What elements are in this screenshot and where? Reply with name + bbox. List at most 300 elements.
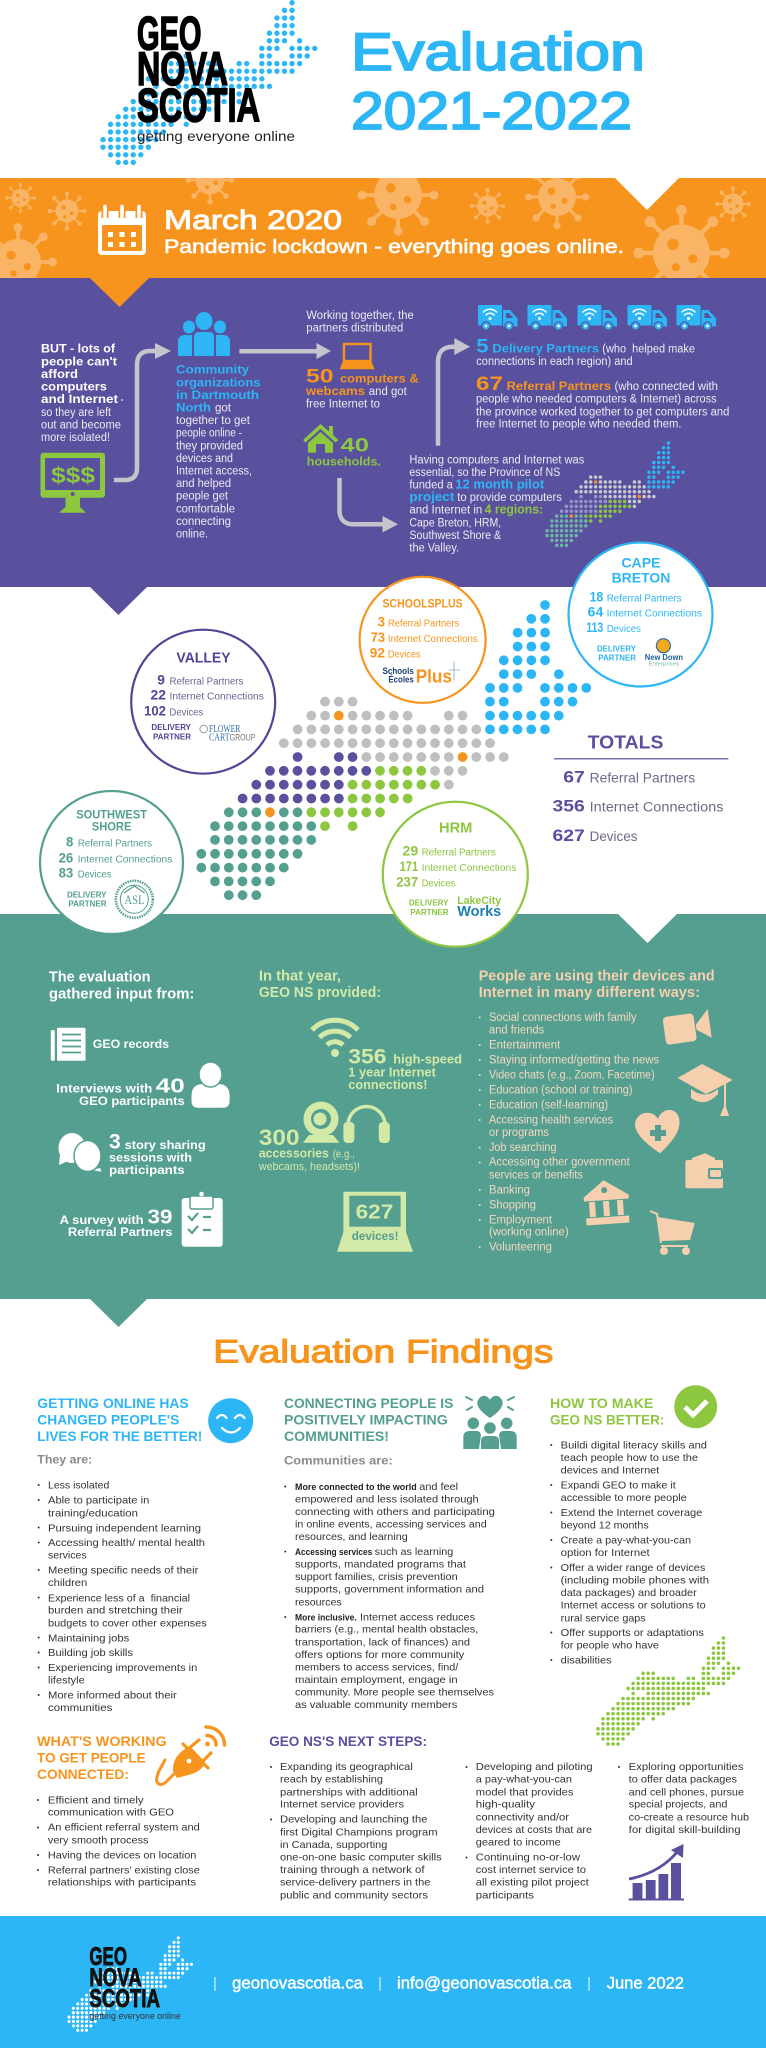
list of uses: Social connections with family [489, 1012, 637, 1024]
text: affordability: out and become [41, 420, 121, 432]
list: offers options for more community [295, 1649, 465, 1661]
text: referral partners: free Internet to people who needed them. [476, 419, 682, 431]
list: maintain employment, engage in [295, 1674, 458, 1686]
heading: TO GET PEOPLE [37, 1750, 146, 1766]
orange pointer [90, 278, 149, 307]
list: rural service gaps [561, 1612, 646, 1624]
arrow: to distribution [239, 343, 331, 359]
story sessions: participants [109, 1163, 185, 1177]
next steps column 2: devices at costs that are [476, 1824, 592, 1836]
list: training/education [48, 1507, 138, 1519]
next steps column 2: all existing pilot project [476, 1877, 589, 1889]
text: community organizations: Internet access, [176, 466, 252, 478]
region: southwest shore: DELIVERY [67, 889, 107, 899]
subheading: Communities are: [284, 1454, 393, 1468]
next steps column 3: co-create a resource hub [629, 1811, 749, 1823]
story sessions: sessions with [109, 1150, 192, 1164]
geo records: GEO records [93, 1037, 169, 1051]
text: community organizations [176, 363, 261, 540]
text: 50 computers: and got [369, 386, 408, 398]
icon: 627 devices laptop [337, 1192, 413, 1252]
list [551, 1439, 709, 1666]
region: cape breton: 18 [590, 589, 604, 604]
story sessions: 3 [109, 1131, 121, 1154]
column: evaluation input [49, 969, 230, 1247]
text: working together: partners distributed [306, 323, 403, 335]
356 connections: high-speed [393, 1053, 462, 1067]
list: members to access services, find/ [295, 1661, 458, 1673]
text: delivery partners: connections in each region) and [476, 356, 633, 368]
text: pilot project: project [409, 490, 455, 504]
list: community. More people see themselves [295, 1686, 494, 1698]
text: delivery partners [476, 336, 695, 368]
text: pilot project: and Internet in [409, 505, 482, 517]
logo wordmark [137, 6, 260, 132]
region: valley: VALLEY [176, 649, 231, 666]
panel: next steps [269, 1733, 749, 1901]
icon: people [178, 312, 230, 356]
icon: graduation cap [678, 1064, 733, 1116]
text: 50 computers: free Internet to [306, 399, 380, 411]
region: schoolsplus: SCHOOLSPLUS [382, 596, 463, 610]
list: Internet access reduces [360, 1611, 475, 1623]
list: An efficient referral system and [48, 1822, 200, 1834]
panel: march 2020 banner [0, 178, 766, 278]
list of uses: services or benefits [489, 1169, 583, 1181]
heading: Internet in many different ways: [479, 984, 700, 1001]
text: community organizations: devices and [176, 453, 233, 465]
text: community organizations: people online - [176, 428, 242, 440]
region: valley: Internet Connections [170, 692, 264, 703]
heading [284, 1395, 453, 1444]
heading: CONNECTED: [37, 1766, 129, 1782]
text: community organizations: people get [176, 491, 229, 503]
list: burden and stretching their [48, 1605, 183, 1617]
356 connections: 356 [348, 1045, 386, 1068]
footer logo [69, 1938, 192, 2030]
banner subheading: Pandemic lockdown - everything goes online. [164, 237, 624, 258]
region: valley: 22 [150, 688, 166, 703]
evaluation findings heading: Evaluation Findings [213, 1333, 553, 1369]
list of uses: Banking [489, 1184, 530, 1196]
virus pattern [0, 178, 751, 278]
icon: plug with wifi [157, 1727, 224, 1784]
totals: Internet Connections [590, 800, 724, 815]
text: community organizations: online. [176, 528, 208, 540]
list: Referral partners' existing close [48, 1864, 200, 1876]
text: referral partners: Referral Partners [507, 379, 611, 393]
next steps column 3: Exploring opportunities [629, 1761, 744, 1773]
logo: lake city works: Works [457, 903, 501, 920]
icon: check [674, 1385, 717, 1428]
text: community organizations: comfortable [176, 503, 235, 515]
region: schoolsplus [360, 577, 486, 703]
footer date: June 2022 [607, 1973, 684, 1992]
region: hrm: DELIVERY [409, 898, 449, 908]
logo: new dawn [645, 639, 683, 668]
list: as valuable community members [295, 1699, 457, 1711]
text: 50 computers: webcams [305, 384, 365, 398]
region: cape breton: 64 [588, 605, 604, 620]
region: schoolsplus: Devices [388, 650, 421, 661]
heading: In that year, [259, 968, 341, 985]
356 connections: connections! [348, 1078, 428, 1092]
footer dividers [215, 1977, 589, 1991]
logo: schools plus: Schools [382, 666, 414, 676]
icon: video camera [662, 1009, 712, 1045]
mini dotted map [547, 443, 683, 545]
region: southwest shore: Devices [78, 870, 111, 881]
interviews: Interviews with [56, 1082, 152, 1096]
text: pilot project: 12 month pilot [455, 478, 545, 492]
text: affordability: and Internet [41, 392, 118, 406]
interviews: 40 [156, 1075, 185, 1097]
icon: speech bubbles [58, 1133, 102, 1172]
arrow: to community [114, 343, 171, 480]
icon: 627 devices laptop: 627 [356, 1201, 393, 1223]
notch [618, 914, 677, 943]
region: valley: DELIVERY [151, 722, 191, 732]
list: beyond 12 months [561, 1519, 649, 1531]
heading [37, 1733, 167, 1782]
text: delivery partners: Delivery Partners [492, 341, 599, 355]
text: pilot project: Southwest Shore & [409, 530, 502, 542]
icon: 627 devices laptop: devices! [352, 1229, 399, 1243]
logo: flower cart: GROUP [230, 732, 256, 742]
list [38, 1794, 200, 1889]
300 accessories [258, 1125, 360, 1173]
list: More connected to the world [295, 1482, 417, 1492]
region: schoolsplus: Internet Connections [388, 634, 478, 645]
region: cape breton: DELIVERY [597, 643, 636, 653]
icon: orange laptop [340, 344, 375, 369]
logo: lake city works: LakeCity [457, 895, 502, 907]
main title: Evaluation [351, 23, 645, 82]
heading: The evaluation [49, 969, 150, 986]
region: cape breton: Devices [607, 624, 641, 635]
region: schoolsplus: 73 [371, 630, 385, 645]
heading: POSITIVELY IMPACTING [284, 1411, 448, 1427]
list of uses: Staying informed/getting the news [489, 1054, 659, 1066]
heading: GETTING ONLINE HAS [37, 1395, 189, 1411]
list of uses: Accessing other government [489, 1157, 630, 1169]
heading [550, 1395, 664, 1427]
subheading: They are: [37, 1452, 92, 1466]
region: cape breton: Internet Connections [607, 609, 702, 620]
column: geo ns provided [258, 968, 462, 1252]
icon: calendar [98, 206, 146, 255]
icon: heart with cross [635, 1110, 680, 1153]
text: working together [306, 310, 414, 335]
totals: 627 [552, 827, 585, 845]
region: valley: PARTNER [153, 731, 191, 741]
text: pilot project: Cape Breton, HRM, [409, 517, 501, 529]
list of uses: or programs [489, 1127, 549, 1139]
next steps column 3 [619, 1761, 749, 1836]
purple pointer [90, 587, 147, 615]
list: barriers (e.g., mental health obstacles, [295, 1624, 478, 1636]
next steps column 1: partnerships with additional [280, 1786, 418, 1798]
list: accessible to more people [561, 1492, 687, 1504]
text: affordability: so they are left [41, 407, 112, 419]
logo: new dawn: Enterprises [649, 662, 679, 668]
region: southwest shore: Referral Partners [78, 839, 152, 850]
heading [479, 968, 715, 1001]
icon: smiley [208, 1398, 253, 1443]
region: schoolsplus: Referral Partners [388, 619, 459, 630]
list of uses: and friends [489, 1024, 544, 1036]
icon: monitor with dollars: $$$ [51, 463, 95, 488]
text: affordability: afford [41, 367, 78, 381]
next steps column 3: for digital skill-building [629, 1824, 741, 1836]
text: 40 households [307, 436, 381, 469]
next steps column 3: special projects, and [629, 1799, 728, 1811]
region: valley: 102 [144, 703, 166, 718]
next steps column 2: a pay-what-you-can [476, 1774, 572, 1786]
list: (including mobile phones with [561, 1574, 709, 1586]
footer wordmark [89, 1943, 160, 2013]
heading: GEO NS provided: [259, 984, 381, 1001]
next steps column 3: and cell phones, pursue [629, 1786, 744, 1798]
panel: teal evaluation [0, 914, 766, 1327]
list: Expandi GEO to make it [561, 1479, 676, 1491]
icon: shopping cart [650, 1211, 695, 1255]
text: pilot project: essential, so the Province of NS [409, 467, 561, 479]
list of uses: Shopping [489, 1199, 536, 1211]
region: hrm [383, 802, 528, 947]
list: More informed about their [48, 1690, 177, 1702]
interviews [56, 1075, 185, 1108]
survey: Referral Partners [68, 1225, 173, 1239]
region: valley: Referral Partners [170, 676, 243, 687]
list [285, 1481, 495, 1711]
list: very smooth process [48, 1834, 148, 1846]
list: Internet access or solutions to [561, 1600, 706, 1612]
text: working together: Working together, the [306, 310, 414, 322]
region: hrm: PARTNER [410, 907, 448, 917]
next steps column 1 [271, 1761, 442, 1901]
region: schoolsplus: 92 [370, 646, 385, 661]
text: community organizations: North [176, 400, 211, 414]
list: relationships with participants [48, 1877, 196, 1889]
story sessions: story sharing [125, 1138, 206, 1152]
logo tagline: getting everyone online [137, 128, 295, 144]
list: for people who have [561, 1640, 659, 1652]
icon: wallet [685, 1153, 723, 1188]
region: southwest shore: SHORE [92, 820, 131, 834]
next steps column 1: Developing and launching the [280, 1814, 428, 1826]
footer email: info@geonovascotia.ca [397, 1973, 572, 1992]
text: community organizations: connecting [176, 516, 231, 528]
logo: ASL: ASL [124, 892, 145, 907]
totals: Referral Partners [590, 771, 695, 786]
region: cape breton [568, 542, 712, 686]
next steps column 2: model that provides [476, 1786, 574, 1798]
list: Experience less of a financial [48, 1592, 190, 1604]
text: community organizations: and helped [176, 478, 231, 490]
text: pilot project: funded a [409, 480, 453, 492]
logo: flower cart [200, 723, 256, 744]
list of uses [480, 1012, 659, 1254]
text: delivery partners: (who helped make [602, 343, 695, 355]
region: valley [131, 630, 275, 774]
region: cape breton: CAPE [621, 554, 660, 570]
logo: flower cart: CART [209, 732, 230, 744]
list: Efficient and timely [48, 1794, 144, 1806]
next steps column 2: geared to income [476, 1836, 561, 1848]
list of uses: Employment [489, 1214, 553, 1226]
logo wordmark: GEO [137, 6, 202, 60]
survey: A survey with [60, 1213, 144, 1227]
list: supports, government information and [295, 1584, 484, 1596]
region: hrm: Internet Connections [422, 863, 516, 874]
icon: community heart [463, 1396, 517, 1449]
list: teach people how to use the [561, 1452, 698, 1464]
main title: 2021-2022 [351, 82, 632, 141]
list of uses: Entertainment [489, 1039, 561, 1051]
next steps column 1: in Canada, supporting [280, 1839, 388, 1851]
survey [60, 1206, 173, 1239]
heading: HOW TO MAKE [550, 1395, 653, 1411]
interviews: GEO participants [79, 1094, 185, 1108]
list: lifestyle [48, 1675, 85, 1687]
next steps column 1: Expanding its geographical [280, 1761, 413, 1773]
panel: getting online [37, 1395, 253, 1714]
list of uses: (working online) [489, 1227, 569, 1239]
icon: webcam [303, 1102, 340, 1143]
text: pilot project: 4 regions: [485, 503, 543, 517]
text: pilot project: Having computers and Internet was [409, 454, 585, 466]
panel: how to make geo ns better [550, 1385, 739, 1744]
list: resources [295, 1596, 342, 1608]
next steps column 2: high-quality [476, 1799, 536, 1811]
footer wordmark: SCOTIA [89, 1985, 160, 2013]
text: pilot project: to provide computers [457, 492, 562, 504]
arrow: to partners [438, 338, 470, 446]
logo: schools plus: Écoles [388, 674, 414, 684]
region: southwest shore: 8 [66, 835, 74, 850]
panel: connecting people [284, 1395, 517, 1711]
heading [37, 1395, 202, 1444]
300 accessories: 300 [259, 1125, 300, 1150]
list: Offer supports or adaptations [561, 1627, 704, 1639]
text: community organizations: in Dartmouth [176, 388, 259, 402]
logo dotted map [103, 3, 315, 162]
footer tagline: getting everyone online [89, 2011, 181, 2022]
text: affordability: - [120, 392, 124, 406]
icon: document [51, 1028, 86, 1061]
next steps column 2: connectivity and/or [476, 1811, 570, 1823]
text: affordability: more isolated! [41, 432, 110, 444]
heading: People are using their devices and [479, 968, 715, 985]
list of uses: Volunteering [489, 1242, 552, 1254]
list: transportation, lack of finances) and [295, 1636, 470, 1648]
arrow: to pilot project [340, 478, 398, 532]
text: community organizations: organizations [176, 375, 261, 389]
heading: GEO NS BETTER: [550, 1411, 664, 1427]
icon: clipboard [182, 1192, 223, 1247]
list of uses: Video chats (e.g., Zoom, Facetime) [489, 1069, 655, 1081]
next steps column 1: service-delivery partners in the [280, 1877, 431, 1889]
list: option for Internet [561, 1547, 650, 1559]
region: schoolsplus: 3 [378, 615, 385, 630]
text: pilot project [409, 454, 585, 554]
300 accessories: accessories [259, 1146, 329, 1160]
list: data packages) and broader [561, 1587, 697, 1599]
text: referral partners [476, 374, 729, 431]
column: ways of using internet [479, 968, 733, 1255]
region: cape breton: PARTNER [598, 653, 636, 663]
region: hrm: Devices [422, 878, 455, 889]
text: referral partners: the province worked together to get computers and [476, 406, 729, 418]
list: communities [48, 1702, 112, 1714]
banner heading: March 2020 [164, 205, 342, 235]
list: Create a pay-what-you-can [561, 1534, 691, 1546]
heading: LIVES FOR THE BETTER! [37, 1428, 202, 1444]
next steps column 2: cost internet service to [476, 1864, 586, 1876]
list: connecting with others and participating [295, 1506, 495, 1518]
list: such as learning [375, 1546, 453, 1558]
heading: gathered input from: [49, 985, 194, 1002]
region: southwest shore: Internet Connections [78, 854, 172, 865]
text: affordability: people can't [41, 354, 117, 368]
totals [552, 732, 728, 845]
logo: new dawn: New Down [645, 653, 683, 662]
next steps column 2: Continuing no-or-low [476, 1852, 580, 1864]
text: 50 computers: 50 [306, 367, 334, 388]
text: 50 computers [305, 367, 419, 411]
text: community organizations: together to get [176, 415, 251, 427]
list [39, 1480, 207, 1714]
list: Accessing services [295, 1547, 372, 1557]
story sessions [109, 1131, 206, 1177]
next steps column 1: first Digital Champions program [280, 1826, 438, 1838]
list: empowered and less isolated through [295, 1494, 479, 1506]
list: Having the devices on location [48, 1849, 197, 1861]
logo wordmark: SCOTIA [137, 78, 260, 132]
heading: CONNECTING PEOPLE IS [284, 1395, 453, 1411]
region: southwest shore: 26 [59, 850, 74, 865]
icon: delivery trucks [478, 305, 716, 330]
heading: GEO NS'S NEXT STEPS: [269, 1733, 427, 1749]
region: southwest shore: SOUTHWEST [76, 808, 148, 822]
region: cape breton: Referral Partners [607, 593, 682, 604]
text: 40 households: 40 [340, 436, 369, 457]
text: referral partners: people who needed computers & Internet) across [476, 394, 717, 406]
next steps column 1: one-on-one basic computer skills [280, 1852, 442, 1864]
list: Experiencing improvements in [48, 1662, 197, 1674]
green dotted map [598, 1638, 739, 1744]
next steps column 3: to offer data packages [629, 1774, 737, 1786]
survey: 39 [148, 1206, 172, 1228]
text: referral partners: (who connected with [614, 381, 718, 393]
heading: CHANGED PEOPLE'S [37, 1411, 179, 1427]
356 connections [348, 1045, 462, 1092]
region: hrm: 171 [400, 859, 419, 874]
icon: monitor with dollars [40, 453, 105, 513]
300 accessories: webcams, headsets)! [258, 1161, 360, 1173]
footer website: geonovascotia.ca [232, 1973, 364, 1992]
region: hrm: 29 [402, 844, 418, 859]
text: referral partners: 67 [476, 374, 503, 395]
icon: headphones [343, 1106, 390, 1143]
list: Maintaining jobs [48, 1632, 129, 1644]
logo wordmark: NOVA [137, 42, 228, 95]
logo: schools plus: Plus [416, 667, 452, 687]
region: southwest shore: PARTNER [68, 899, 106, 909]
heading [259, 968, 381, 1001]
region: cape breton: 113 [586, 620, 604, 635]
